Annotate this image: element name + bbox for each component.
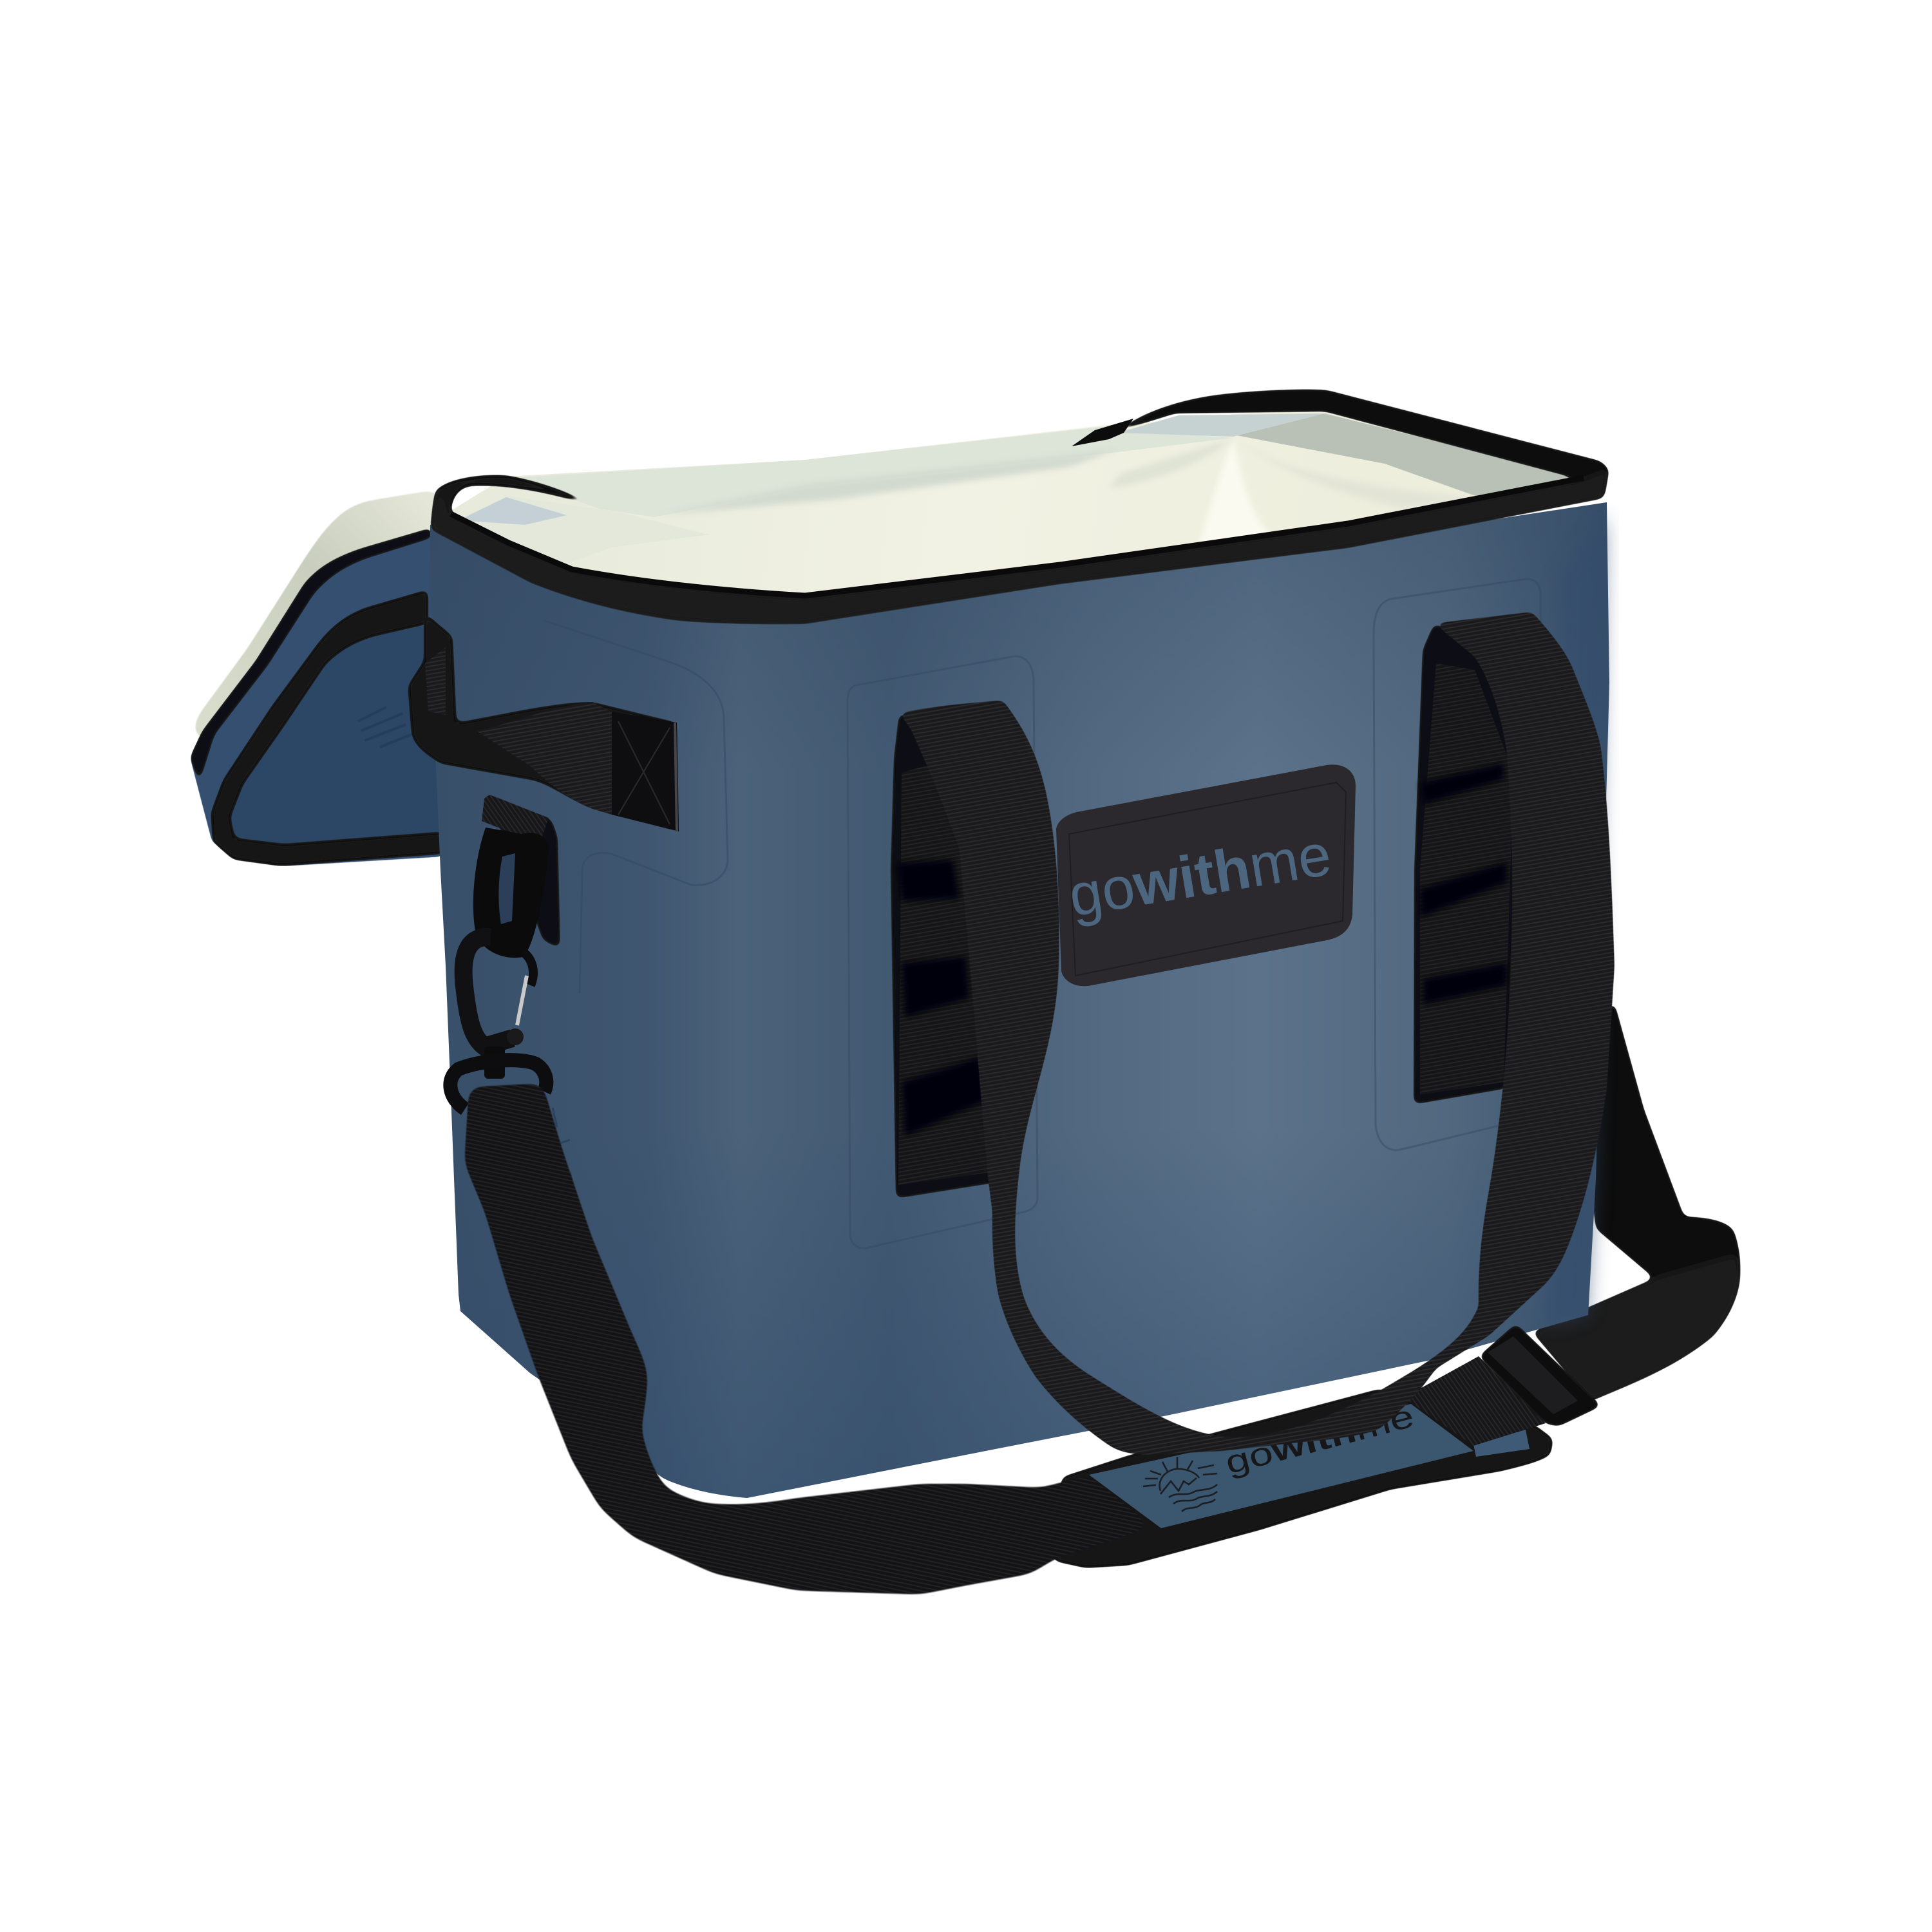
right loop folds	[1420, 763, 1507, 1005]
carabiner gate wire	[517, 976, 527, 1025]
D-ring	[450, 1060, 546, 1109]
handle webbing	[477, 702, 612, 815]
strap section right of pad	[1404, 1356, 1546, 1446]
zipper pull	[1072, 419, 1133, 446]
tote handle rear loops	[891, 623, 1520, 1198]
attachment flap	[482, 795, 560, 949]
seam: left tote panel	[848, 656, 1037, 1248]
bag interior	[440, 406, 1587, 602]
centre fold	[1198, 438, 1272, 547]
ghost marks on side	[553, 1108, 574, 1191]
seam: side panel	[543, 620, 728, 994]
back rim left	[436, 475, 596, 515]
body upper shading	[430, 502, 1609, 773]
bag body	[430, 502, 1609, 1498]
swivel post	[484, 1046, 505, 1079]
shoulder strap: main run	[444, 1075, 1159, 1600]
handle stitched end	[612, 712, 679, 831]
plastic snap	[473, 828, 549, 958]
lid blue side	[190, 531, 444, 866]
open lid	[190, 489, 451, 866]
lid zipper band	[190, 527, 432, 780]
right loop	[1414, 623, 1520, 1104]
left loop folds	[896, 860, 985, 1137]
left loop	[891, 714, 1005, 1198]
strap slider buckle	[1479, 1323, 1602, 1426]
right side shading	[1546, 515, 1607, 1327]
shoulder pad border	[1043, 1389, 1553, 1568]
shoulder strap: rear section behind bag	[1532, 1003, 1740, 1401]
front rim band	[430, 469, 1609, 624]
zipper rim	[430, 390, 1609, 624]
body front and side panel	[430, 502, 1609, 1498]
seam: right tote panel	[1374, 579, 1546, 1150]
lid inner panel	[231, 621, 444, 844]
pad mountain and sun logo	[1143, 1457, 1217, 1511]
shoulder pad	[1089, 1323, 1602, 1528]
lid cream lining	[193, 489, 451, 741]
carabiner	[464, 937, 513, 1046]
pad text: gowith me	[1222, 1397, 1417, 1481]
side handle	[408, 612, 679, 831]
right grey wall	[1233, 413, 1578, 499]
back rim right	[1072, 390, 1609, 496]
lid ghost logo marks	[358, 707, 412, 747]
tote handle strap	[889, 605, 1620, 1459]
lid piping	[211, 589, 444, 866]
body lower shading	[451, 1127, 1596, 1498]
left wall	[455, 496, 708, 564]
swivel snap hardware	[450, 795, 560, 1109]
zipper teeth	[451, 478, 1584, 596]
small pad blue tab	[1059, 1480, 1098, 1501]
back wall strip	[515, 426, 1233, 517]
pad blue panel	[1089, 1404, 1473, 1528]
logo patch	[1056, 764, 1356, 986]
patch logo text: gowithme	[1065, 822, 1336, 929]
interior base cream	[440, 406, 1587, 602]
